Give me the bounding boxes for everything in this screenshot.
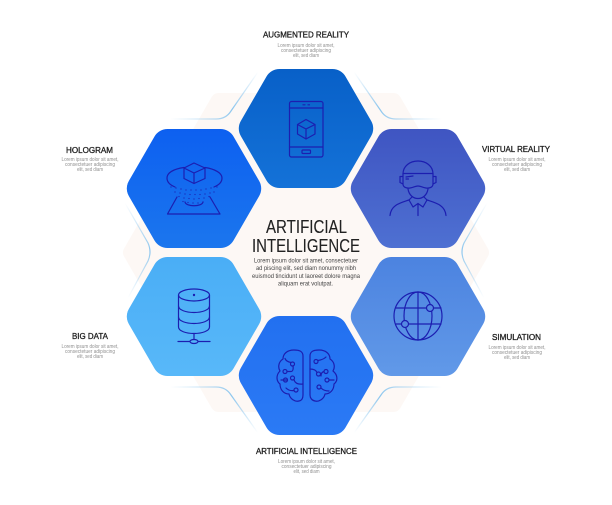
label: artificial intelligence [256,446,357,475]
label: virtual reality [482,144,550,173]
label: artificial intelligence: ARTIFICIAL INTELLIGENCE [256,446,357,456]
label: virtual reality: Lorem ipsum dolor sit amet, [488,157,546,163]
label: augmented reality [263,30,349,59]
icon: hologram cube on projection plane [167,163,222,214]
icon: database server [178,289,210,344]
label: artificial intelligence: elit, sed diam [294,469,320,475]
center title: ARTIFICIAL [266,217,347,237]
label: big data: elit, sed diam [77,354,103,360]
label: augmented reality: consectetuer adipiscing [281,48,331,54]
center body text: Lorem ipsum dolor sit amet, consectetuer [254,258,359,264]
center body text: aliquam erat volutpat. [278,280,333,288]
label: virtual reality: elit, sed diam [504,167,530,173]
label: big data [62,331,118,360]
label: big data: consectetuer adipiscing [65,349,115,355]
label: big data: BIG DATA [72,331,108,341]
center title: INTELLIGENCE [252,236,360,256]
panel: artificial intelligence hexagon [239,316,373,435]
label: simulation: Lorem ipsum dolor sit amet, [488,345,546,351]
panel: augmented reality hexagon [239,69,373,188]
icon: person wearing VR headset [390,161,446,216]
center body text: ad piscing elit, sed diam nonummy nibh [256,265,356,272]
label: virtual reality: VIRTUAL REALITY [482,144,550,154]
label: simulation: SIMULATION [492,332,541,342]
label: artificial intelligence: consectetuer adipiscing [282,464,332,470]
center body text: euismod tincidunt ut laoreet dolore magna [252,273,360,280]
panel: virtual reality hexagon [351,129,485,248]
label: hologram: Lorem ipsum dolor sit amet, [62,157,118,163]
label: hologram [62,145,118,173]
icon: circuit brain [277,350,337,401]
label: augmented reality: AUGMENTED REALITY [263,30,349,40]
icon: globe with nodes [394,292,442,340]
decorative connector arcs [125,72,487,433]
label: simulation [488,332,546,361]
panel: simulation hexagon [351,257,485,376]
label: artificial intelligence: Lorem ipsum dolor sit amet, [278,459,335,465]
label: simulation: elit, sed diam [504,355,530,361]
center body text [252,258,360,288]
center title [252,217,360,256]
label: virtual reality: consectetuer adipiscing [492,162,542,168]
label: simulation: consectetuer adipiscing [492,350,542,356]
label: augmented reality: elit, sed diam [293,53,319,59]
label: augmented reality: Lorem ipsum dolor sit amet, [278,43,334,49]
panel: big data hexagon [127,257,261,376]
label: hologram: elit, sed diam [77,167,103,173]
icon: smartphone with cube [290,102,323,157]
background hexagon [131,101,481,404]
label: big data: Lorem ipsum dolor sit amet, [62,344,118,350]
label: hologram: consectetuer adipiscing [65,162,115,168]
label: hologram: HOLOGRAM [66,145,113,155]
panel: hologram hexagon [127,129,261,248]
